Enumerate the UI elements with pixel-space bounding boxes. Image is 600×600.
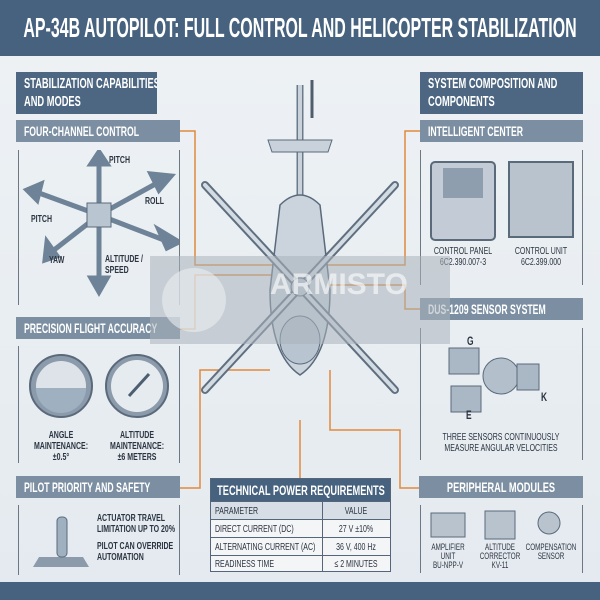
- panel: intelligent center: CONTROL UNIT: [515, 246, 567, 257]
- panel: pilot: ACTUATOR TRAVEL: [97, 513, 165, 524]
- panel: peripheral: UNIT: [441, 551, 455, 561]
- left heading: stabilization: [16, 72, 157, 114]
- panel: intelligent center: CONTROL PANEL: [434, 246, 492, 257]
- panel: four-channel diagram: SPEED: [105, 265, 129, 276]
- sub: intelligent center: INTELLIGENT CENTER: [428, 123, 523, 139]
- panel: intelligent center: [420, 150, 583, 285]
- left heading: stabilization: AND MODES: [24, 93, 81, 110]
- sub: DUS sensor: [420, 298, 583, 320]
- panel: gauges: MAINTENANCE:: [34, 441, 88, 452]
- table: technical power requirements: ≤ 2 MINUTES: [334, 559, 378, 570]
- panel: sensor: E: [466, 408, 472, 422]
- panel: gauges: ±6 METERS: [118, 452, 156, 463]
- right heading: SYSTEM COMPOSITION AND: [428, 75, 557, 92]
- panel: four-channel diagram: [18, 150, 180, 305]
- panel: four-channel diagram: ROLL: [145, 196, 164, 207]
- sub: DUS sensor: DUS-1209 SENSOR SYSTEM: [428, 301, 546, 317]
- panel: peripheral: AMPLIFIER: [431, 542, 465, 552]
- panel: gauges: [18, 346, 180, 463]
- panel: peripheral: [420, 505, 583, 573]
- panel: peripheral: CORRECTOR: [480, 551, 520, 561]
- panel: four-channel diagram: YAW: [49, 255, 64, 266]
- panel: four-channel diagram: ALTITUDE /: [105, 254, 143, 265]
- panel: pilot: [18, 505, 180, 575]
- panel: sensor: MEASURE ANGULAR VELOCITIES: [444, 443, 558, 454]
- sub: pilot priority: [16, 476, 180, 498]
- panel: four-channel diagram: PITCH: [31, 214, 52, 225]
- right heading: COMPONENTS: [428, 93, 495, 110]
- panel: peripheral: KV-11: [492, 560, 508, 570]
- panel: gauges: ±0.5°: [53, 452, 69, 463]
- table: technical power requirements: ALTERNATING CURRENT (AC): [215, 542, 315, 553]
- table: technical power requirements: TECHNICAL POWER REQUIREMENTS: [217, 482, 384, 498]
- sub: pilot priority: PILOT PRIORITY AND SAFETY: [24, 479, 150, 495]
- panel: gauges: MAINTENANCE:: [110, 441, 164, 452]
- panel: intelligent center: 6C2.390.007-3: [440, 257, 486, 268]
- table: technical power requirements: 27 V ±10%: [339, 524, 373, 535]
- sub: intelligent center: [420, 120, 583, 142]
- sub: four-channel: FOUR-CHANNEL CONTROL: [24, 123, 139, 139]
- sub: peripheral: [419, 476, 583, 498]
- table: technical power requirements: READINESS TIME: [215, 559, 274, 570]
- table: technical power requirements: VALUE: [345, 506, 367, 517]
- panel: pilot: PILOT CAN OVERRIDE: [97, 541, 173, 552]
- panel: sensor: [420, 328, 583, 460]
- right heading: [420, 72, 583, 114]
- sub: precision: [16, 317, 180, 339]
- sub: four-channel: [16, 120, 180, 142]
- panel: gauges: ANGLE: [49, 430, 73, 441]
- bottom bar: [0, 582, 600, 600]
- header bar: [0, 0, 600, 56]
- left heading: stabilization: STABILIZATION CAPABILITIES: [24, 75, 157, 92]
- panel: sensor: G: [467, 334, 474, 348]
- watermark overlay: ARMISTO: [270, 268, 408, 301]
- watermark overlay: [150, 256, 450, 344]
- panel: pilot: LIMITATION UP TO 20%: [97, 524, 175, 535]
- panel: peripheral: SENSOR: [538, 551, 564, 561]
- table: technical power requirements: 36 V, 400 Hz: [336, 542, 376, 553]
- panel: sensor: K: [541, 390, 547, 404]
- labels: PITCH: [109, 155, 130, 166]
- table: technical power requirements: DIRECT CURRENT (DC): [215, 524, 294, 535]
- panel: peripheral: ALTITUDE: [485, 542, 515, 552]
- panel: sensor: THREE SENSORS CONTINUOUSLY: [443, 432, 559, 443]
- table: technical power requirements: [210, 478, 391, 572]
- panel: intelligent center: 6C2.399.000: [521, 257, 561, 268]
- sub: precision: PRECISION FLIGHT ACCURACY: [24, 320, 157, 336]
- panel: pilot: AUTOMATION: [97, 552, 144, 563]
- title: AP-34B AUTOPILOT: FULL CONTROL AND HELICOPTER STABILIZATION: [23, 12, 577, 43]
- sub: peripheral: PERIPHERAL MODULES: [447, 479, 555, 495]
- panel: peripheral: COMPENSATION: [526, 542, 576, 552]
- panel: peripheral: BU-NPP-V: [433, 560, 463, 570]
- panel: gauges: ALTITUDE: [120, 430, 154, 441]
- table: technical power requirements: PARAMETER: [215, 506, 258, 517]
